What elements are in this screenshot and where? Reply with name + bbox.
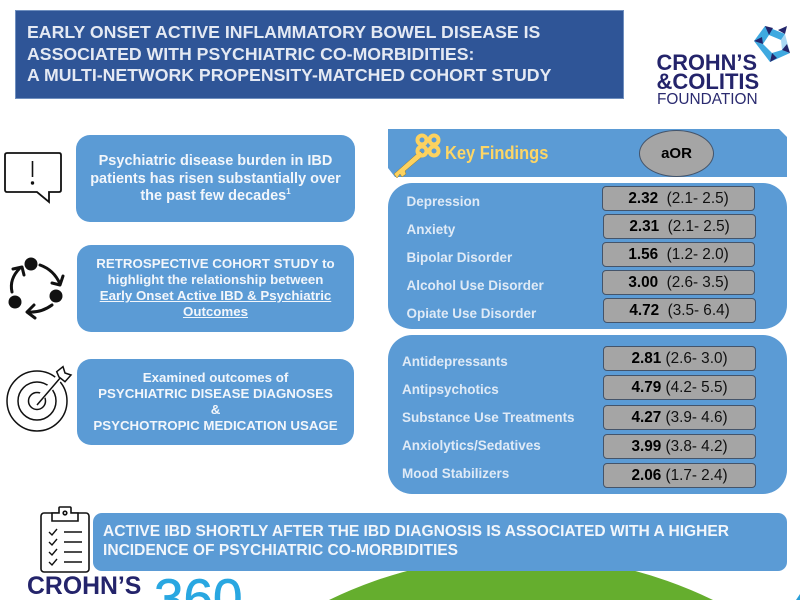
box: retrospective cohort study: RETROSPECTIVE COHORT STUDY to [96, 256, 335, 271]
title banner [15, 10, 624, 99]
icon: speech bubble with exclamation [4, 152, 62, 204]
panel: psychiatric diagnoses [388, 183, 787, 329]
value: alcohol use disorder [602, 270, 755, 295]
row: opiate use disorder: Opiate Use Disorder [406, 306, 536, 321]
value: substance use treatments [603, 405, 756, 430]
value: mood stabilizers: 2.06 (1.7- 2.4) [631, 467, 728, 484]
key findings header [388, 129, 787, 177]
logo star mark [754, 26, 790, 62]
aOR ellipse: aOR [661, 145, 692, 162]
value: substance use treatments: 4.27 (3.9- 4.6) [631, 409, 728, 426]
value: antipsychotics: 4.79 (4.2- 5.5) [631, 379, 728, 396]
title banner: A MULTI-NETWORK PROPENSITY-MATCHED COHORT STUDY [27, 65, 551, 85]
value: antidepressants [603, 346, 756, 371]
aOR ellipse [639, 130, 714, 177]
value: anxiety [603, 214, 756, 239]
box: examined outcomes: Examined outcomes of [143, 370, 288, 385]
box: disease burden: Psychiatric disease burden in IBD [99, 153, 332, 169]
box: retrospective cohort study: Outcomes [183, 304, 248, 319]
row: depression: Depression [406, 194, 480, 209]
row: mood stabilizers: Mood Stabilizers [402, 466, 509, 481]
box: examined outcomes: PSYCHIATRIC DISEASE DIAGNOSES [98, 386, 333, 401]
value: opiate use disorder [603, 298, 756, 323]
icon: target with arrow [6, 365, 72, 432]
value: antidepressants: 2.81 (2.6- 3.0) [631, 350, 728, 367]
row: antipsychotics: Antipsychotics [402, 382, 499, 397]
panel: psychotropic medications [388, 335, 787, 494]
title banner: ASSOCIATED WITH PSYCHIATRIC CO-MORBIDITIES: [27, 44, 474, 64]
value: anxiolytics/sedatives: 3.99 (3.8- 4.2) [631, 438, 728, 455]
icon: cycle arrows [8, 258, 64, 320]
box: examined outcomes: PSYCHOTROPIC MEDICATION USAGE [93, 418, 338, 433]
row: anxiety: Anxiety [406, 222, 455, 237]
box: retrospective cohort study: highlight the relationship between [108, 272, 323, 287]
value: depression [602, 186, 755, 211]
row: bipolar disorder: Bipolar Disorder [406, 250, 512, 265]
box: disease burden [76, 135, 355, 222]
logo: Crohn's 360 [27, 572, 242, 600]
icon: golden key [394, 134, 440, 178]
logo: Crohn's & Colitis Foundation: FOUNDATION [657, 91, 758, 108]
value: antipsychotics [603, 375, 756, 400]
logo: Crohn's & Colitis Foundation [656, 26, 790, 108]
conclusion box: ACTIVE IBD SHORTLY AFTER THE IBD DIAGNOSIS IS ASSOCIATED WITH A HIGHER [103, 523, 729, 540]
box: disease burden: patients has risen substantially over [90, 170, 341, 186]
box: examined outcomes [77, 359, 354, 445]
Crohn's wordmark: CROHN’S [27, 573, 141, 600]
box: examined outcomes: & [211, 402, 220, 417]
value: bipolar disorder: 1.56 (1.2- 2.0) [628, 246, 729, 263]
logo: Crohn's & Colitis Foundation: CROHN’S [656, 50, 757, 75]
logo: Crohn's & Colitis Foundation: &COLITIS [656, 69, 759, 94]
box: retrospective cohort study [77, 245, 354, 332]
row: antidepressants: Antidepressants [402, 354, 508, 369]
value: depression: 2.32 (2.1- 2.5) [628, 190, 729, 207]
row: anxiolytics/sedatives: Anxiolytics/Sedatives [402, 438, 541, 453]
value: opiate use disorder: 4.72 (3.5- 6.4) [629, 302, 730, 319]
value: bipolar disorder [602, 242, 755, 267]
icon: clipboard checklist [40, 506, 90, 573]
value: alcohol use disorder: 3.00 (2.6- 3.5) [628, 274, 729, 291]
value: mood stabilizers [603, 463, 756, 488]
value: anxiety: 2.31 (2.1- 2.5) [629, 218, 730, 235]
row: substance use treatments: Substance Use Treatments [402, 410, 575, 425]
conclusion box [93, 513, 787, 571]
conclusion box: INCIDENCE OF PSYCHIATRIC CO-MORBIDITIES [103, 542, 458, 559]
title banner: EARLY ONSET ACTIVE INFLAMMATORY BOWEL DISEASE IS [27, 22, 540, 42]
box: retrospective cohort study: Early Onset Active IBD & Psychiatric [100, 288, 331, 303]
row: alcohol use disorder: Alcohol Use Disorder [406, 278, 544, 293]
box: disease burden: the past few decades1 [140, 187, 291, 204]
value: anxiolytics/sedatives [603, 434, 756, 459]
Key Findings label: Key Findings [445, 142, 548, 163]
